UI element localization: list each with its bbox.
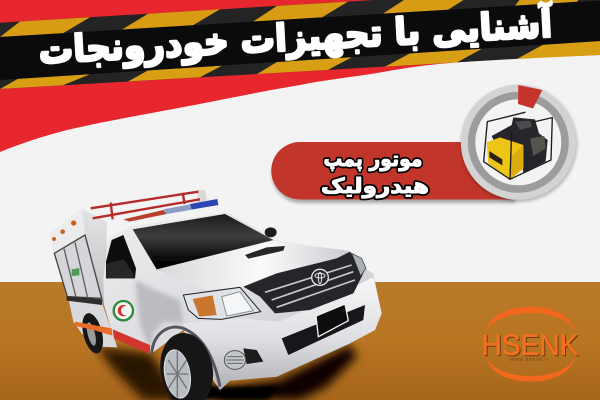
hood scoop bbox=[245, 246, 285, 259]
pump engine highlight bbox=[515, 121, 532, 130]
red banner bbox=[0, 0, 600, 152]
tape black center bbox=[0, 0, 600, 80]
badge inner ring bbox=[468, 92, 569, 193]
right headlight sliver bbox=[352, 253, 366, 276]
roof rack bbox=[91, 192, 200, 219]
pump tank side bbox=[510, 145, 523, 179]
door and fender shading bbox=[135, 280, 183, 352]
lower yellow stripes bbox=[0, 41, 600, 89]
hood bbox=[155, 241, 350, 291]
light bar bbox=[123, 199, 218, 222]
green shutter sign bbox=[72, 268, 79, 276]
front wheel bbox=[160, 333, 214, 400]
box upper rear panel bbox=[50, 208, 85, 253]
HSENK logo bbox=[482, 307, 580, 382]
badge outer ring bbox=[461, 85, 576, 200]
pill line 2: هیدرولیک bbox=[321, 174, 429, 198]
rescue truck bbox=[50, 190, 382, 400]
hood bug guard bbox=[243, 252, 363, 313]
rear box bbox=[68, 208, 107, 305]
upper yellow stripes bbox=[0, 0, 587, 37]
ground shadow bbox=[97, 345, 357, 400]
windshield bbox=[133, 214, 273, 269]
toyota emblem bbox=[312, 269, 328, 285]
icon: hydraulic pump bbox=[484, 112, 552, 179]
logo top arc bbox=[486, 307, 575, 332]
box sill bbox=[67, 296, 103, 305]
fog light bbox=[224, 348, 263, 369]
cab and body bbox=[103, 213, 382, 390]
brown ground bbox=[0, 282, 600, 400]
wheel arch bbox=[152, 327, 220, 387]
pump engine bbox=[492, 117, 548, 173]
headlight bbox=[183, 287, 261, 319]
headlight inner glass bbox=[222, 292, 253, 316]
side window bbox=[106, 235, 136, 278]
pill shadow bbox=[272, 145, 515, 203]
bumper bbox=[183, 277, 382, 390]
rim spokes bbox=[167, 351, 188, 397]
side mirror bbox=[106, 259, 134, 278]
label pill bbox=[271, 142, 515, 203]
grille bars bbox=[265, 265, 355, 307]
license plate bbox=[316, 304, 348, 337]
lower rear body bbox=[68, 298, 117, 347]
logo wordmark: HSENK bbox=[482, 329, 578, 362]
front wheel rim bbox=[164, 349, 192, 399]
orange side stripe bbox=[75, 322, 112, 336]
box side shutter bbox=[54, 235, 102, 298]
pump yellow tank bbox=[487, 137, 523, 179]
pill line 1: موتور پمپ bbox=[324, 147, 422, 171]
red segment bbox=[518, 85, 542, 108]
badge shadow bbox=[461, 86, 577, 202]
rear wheel bbox=[82, 313, 103, 354]
title: آشنایی با تجهیزات خودرونجات bbox=[37, 1, 554, 72]
logo url: www.hsenk.ir bbox=[510, 357, 550, 363]
red crescent logo bbox=[114, 301, 133, 320]
pump label bbox=[489, 151, 502, 165]
far mirror bbox=[265, 227, 277, 237]
pump badge bbox=[461, 85, 577, 202]
roof post bbox=[197, 190, 207, 203]
tape dark base bbox=[0, 0, 600, 89]
pump engine detail bbox=[530, 136, 546, 156]
pill line 2: هیدرولیک bbox=[321, 174, 429, 198]
headlight amber lens bbox=[193, 295, 217, 317]
hazard tape bbox=[0, 0, 600, 89]
pump frame bbox=[484, 112, 552, 179]
logo bottom arc bbox=[486, 357, 575, 382]
red side stripe bbox=[113, 329, 150, 354]
box rear light markers bbox=[52, 220, 76, 241]
shutter divider lines bbox=[64, 242, 88, 298]
lower grille bbox=[282, 305, 365, 355]
pill shape bbox=[271, 142, 515, 200]
logo wordmark shadow: HSENK bbox=[482, 330, 580, 363]
rear wheel rim bbox=[86, 322, 96, 346]
pill line 1: موتور پمپ bbox=[324, 147, 422, 171]
badge face bbox=[475, 99, 561, 185]
